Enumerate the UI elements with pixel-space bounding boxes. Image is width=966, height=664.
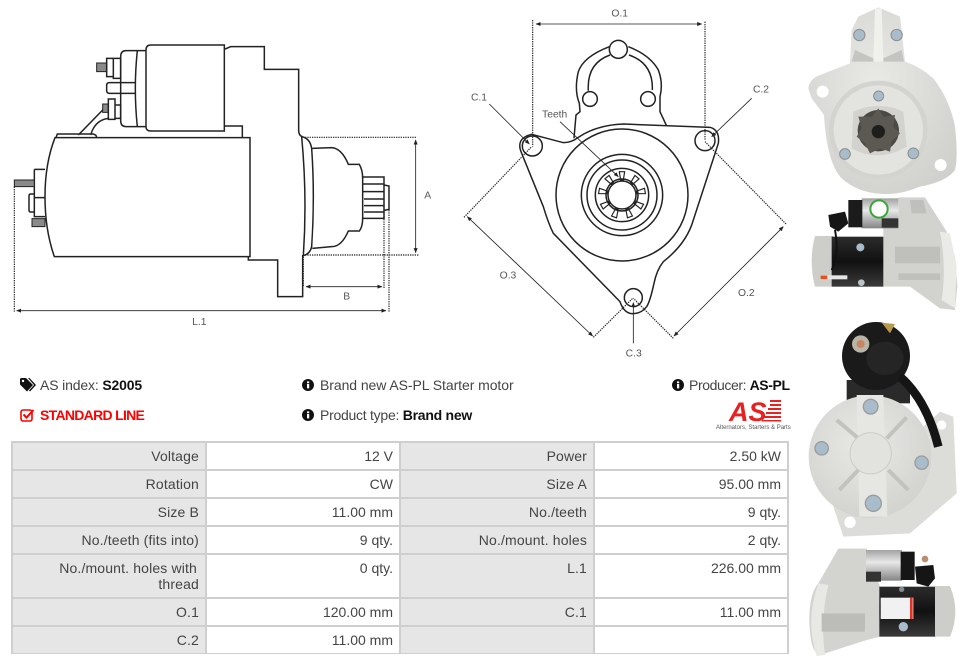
specification table: No./teeth (fits into) (81, 532, 199, 548)
specification table: 9 qty. (748, 504, 781, 520)
technical drawing: front view: Teeth (542, 110, 568, 121)
specification table: 2 qty. (748, 532, 781, 548)
specification table: 226.00 mm (711, 560, 781, 576)
specification table: 2.50 kW (730, 448, 781, 464)
specification table: C.2 (177, 632, 199, 648)
specification table: No./teeth (529, 504, 587, 520)
AS-PL logo: AS (728, 397, 767, 427)
technical drawing: front view: C.3 (626, 348, 642, 359)
AS index: AS index: S2005 (40, 377, 142, 393)
technical drawing: side view: L.1 (192, 317, 207, 328)
producer: Producer: AS-PL (689, 377, 790, 393)
specification table: 120.00 mm (323, 604, 393, 620)
standard line label: STANDARD LINE (40, 407, 144, 423)
specification table: Voltage (151, 448, 199, 464)
specification table: Rotation (146, 476, 199, 492)
specification table: C.1 (565, 604, 587, 620)
specification table: No./mount. holes (479, 532, 587, 548)
info icon (672, 379, 684, 391)
specification table: L.1 (567, 560, 587, 576)
specification table: No./mount. holes with (59, 560, 197, 576)
specification table: 11.00 mm (332, 504, 393, 520)
specification table: Power (547, 448, 587, 464)
technical drawing: front view: O.3 (500, 271, 517, 282)
tag icon (20, 378, 36, 392)
product description: Brand new AS-PL Starter motor (320, 377, 514, 393)
technical drawing: side view: B (343, 291, 350, 302)
technical drawing: front view: C.1 (471, 92, 487, 103)
technical drawing: front view: C.2 (753, 84, 769, 95)
product type: Product type: Brand new (320, 407, 472, 423)
technical drawing: side view: A (424, 191, 431, 202)
checkbox icon (20, 409, 34, 422)
technical drawing: front view: O.2 (738, 288, 755, 299)
specification table: 11.00 mm (720, 604, 781, 620)
specification table: Size B (158, 504, 199, 520)
specification table: O.1 (176, 604, 199, 620)
info icon (302, 409, 314, 421)
specification table: 95.00 mm (719, 476, 781, 492)
specification table: 12 V (364, 448, 393, 464)
technical drawing: front view: O.1 (611, 8, 628, 19)
AS-PL logo (716, 397, 791, 431)
specification table: CW (370, 476, 393, 492)
specification table (11, 441, 789, 654)
info icon (302, 379, 314, 391)
AS-PL logo: Alternators, Starters & Parts (716, 425, 791, 431)
specification table: 0 qty. (360, 560, 393, 576)
specification table: Size A (546, 476, 587, 492)
specification table: 11.00 mm (332, 632, 393, 648)
specification table: 9 qty. (360, 532, 393, 548)
specification table: thread (158, 576, 199, 592)
